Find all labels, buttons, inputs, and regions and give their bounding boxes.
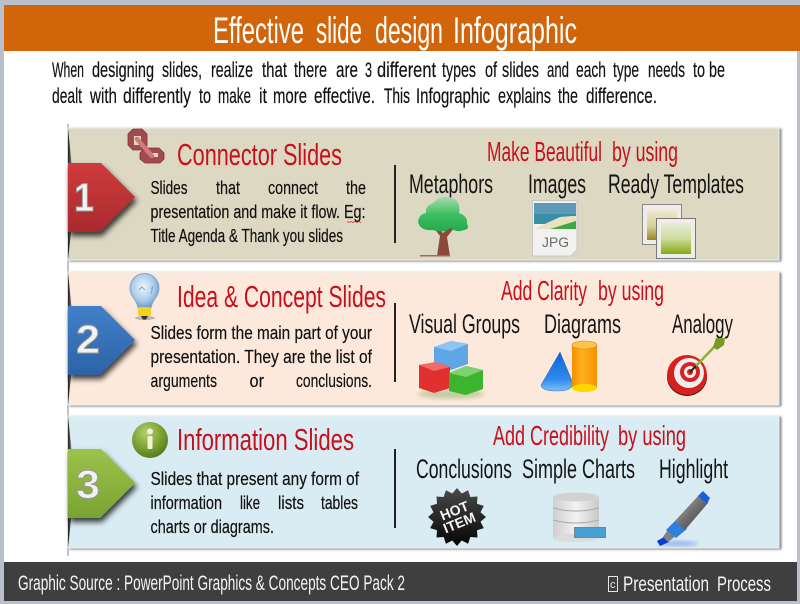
intro text: that xyxy=(262,59,287,82)
icon: cone and cylinder xyxy=(541,341,597,392)
description: like xyxy=(240,492,260,513)
copyright: Process xyxy=(717,573,771,596)
intro text: more xyxy=(273,85,307,108)
subheading: by using xyxy=(612,136,678,167)
panel: idea and concept slides xyxy=(68,272,779,405)
intro text: slides, xyxy=(162,59,202,82)
intro text: make xyxy=(218,85,251,108)
subheading: by using xyxy=(598,275,664,306)
description xyxy=(150,322,373,391)
labels: Conclusions xyxy=(416,454,512,484)
intro text: slides xyxy=(502,59,539,82)
intro text: 3 xyxy=(365,59,372,82)
description: charts or diagrams. xyxy=(150,516,274,537)
intro text: type xyxy=(613,59,639,82)
intro text: needs xyxy=(648,59,685,82)
intro text: differently xyxy=(123,85,191,108)
labels xyxy=(409,169,744,199)
icon: hot item badge: HOT xyxy=(438,497,471,523)
labels: Highlight xyxy=(659,454,728,484)
intro text: This xyxy=(384,85,410,108)
title: slide xyxy=(316,10,362,51)
icon: cubes xyxy=(418,341,484,399)
subheading: Make Beautiful xyxy=(487,136,602,167)
description: tables xyxy=(321,492,358,513)
description: lists xyxy=(278,492,304,513)
intro text: be xyxy=(709,59,725,82)
icon: hot item badge xyxy=(428,488,486,546)
description: arguments xyxy=(150,370,217,391)
heading: Connector Slides xyxy=(177,137,342,172)
panel: information slides xyxy=(68,416,779,548)
intro text: with xyxy=(89,85,117,108)
description: Slides that present any form of xyxy=(150,468,360,489)
description: connect xyxy=(268,177,318,198)
subheading: by using xyxy=(618,420,686,451)
labels: Visual Groups xyxy=(409,309,520,339)
icon: jpg file: JPG xyxy=(542,234,569,250)
description: Title Agenda & Thank you slides xyxy=(150,225,343,246)
arrow 2: 2 xyxy=(76,318,100,362)
labels: Diagrams xyxy=(544,309,621,339)
intro text: to xyxy=(199,85,211,108)
intro text: of xyxy=(485,59,497,82)
intro text: Infographic xyxy=(416,85,490,108)
intro text: When xyxy=(52,59,84,82)
intro text: different xyxy=(377,59,436,82)
arrow 2 xyxy=(68,306,135,375)
intro text: the xyxy=(558,85,578,108)
arrow 1: 1 xyxy=(74,176,94,220)
labels: Analogy xyxy=(672,309,733,339)
icon: target with dart xyxy=(667,338,725,396)
intro text: to xyxy=(693,59,705,82)
intro text: and xyxy=(547,59,569,82)
arrow 1 xyxy=(68,163,135,232)
arrow 3 xyxy=(68,449,135,518)
intro text: each xyxy=(576,59,606,82)
description xyxy=(150,468,360,537)
intro text: it xyxy=(259,85,267,108)
icon: tree xyxy=(418,197,468,256)
icon: jpg file xyxy=(532,200,577,256)
header bar xyxy=(4,5,800,51)
title xyxy=(213,10,577,51)
intro text: are xyxy=(336,59,358,82)
labels: Simple Charts xyxy=(522,454,635,484)
title: Effective xyxy=(213,10,304,51)
intro text: explains xyxy=(498,85,551,108)
icon: chain link xyxy=(128,129,164,163)
intro text: effective. xyxy=(314,85,375,108)
description: presentation. They are the list of xyxy=(150,346,373,367)
intro text: designing xyxy=(92,59,154,82)
subheading: Add Clarity xyxy=(501,275,587,306)
labels: Metaphors xyxy=(409,169,493,199)
description: that xyxy=(216,177,240,198)
description: Slides form the main part of your xyxy=(150,322,372,343)
intro text: types xyxy=(442,59,476,82)
description: presentation and make it flow. Eg: xyxy=(150,201,366,222)
labels xyxy=(409,309,733,339)
icon: ready templates xyxy=(642,204,696,258)
footer bar xyxy=(4,562,797,601)
intro text: realize xyxy=(211,59,253,82)
description: information xyxy=(150,492,222,513)
title: Infographic xyxy=(453,10,577,51)
arrow 3: 3 xyxy=(76,463,100,507)
intro text: there xyxy=(294,59,327,82)
subheading: Add Credibility xyxy=(493,420,609,451)
icon: highlighter xyxy=(657,491,710,546)
description: conclusions. xyxy=(296,370,372,391)
left vertical shadow line xyxy=(67,124,69,556)
intro text xyxy=(52,59,725,108)
heading: Information Slides xyxy=(177,422,354,457)
icon: info ball xyxy=(132,422,168,458)
copyright: c xyxy=(610,579,616,591)
heading: Idea & Concept Slides xyxy=(177,279,386,314)
description: the xyxy=(346,177,366,198)
icon: light bulb xyxy=(130,274,159,320)
source credit: Graphic Source : PowerPoint Graphics & Concepts CEO Pack 2 xyxy=(18,572,405,595)
labels xyxy=(416,454,728,484)
icon: database chart xyxy=(553,492,606,542)
panel: connector slides xyxy=(68,128,779,260)
labels: Images xyxy=(528,169,586,199)
description xyxy=(150,177,366,246)
description: or xyxy=(250,370,264,391)
copyright: Presentation xyxy=(623,573,709,596)
icon: hot item badge: ITEM xyxy=(441,509,478,536)
intro text: dealt xyxy=(52,85,82,108)
title: design xyxy=(375,10,443,51)
intro text: difference. xyxy=(586,85,657,108)
description: Slides xyxy=(150,177,188,198)
